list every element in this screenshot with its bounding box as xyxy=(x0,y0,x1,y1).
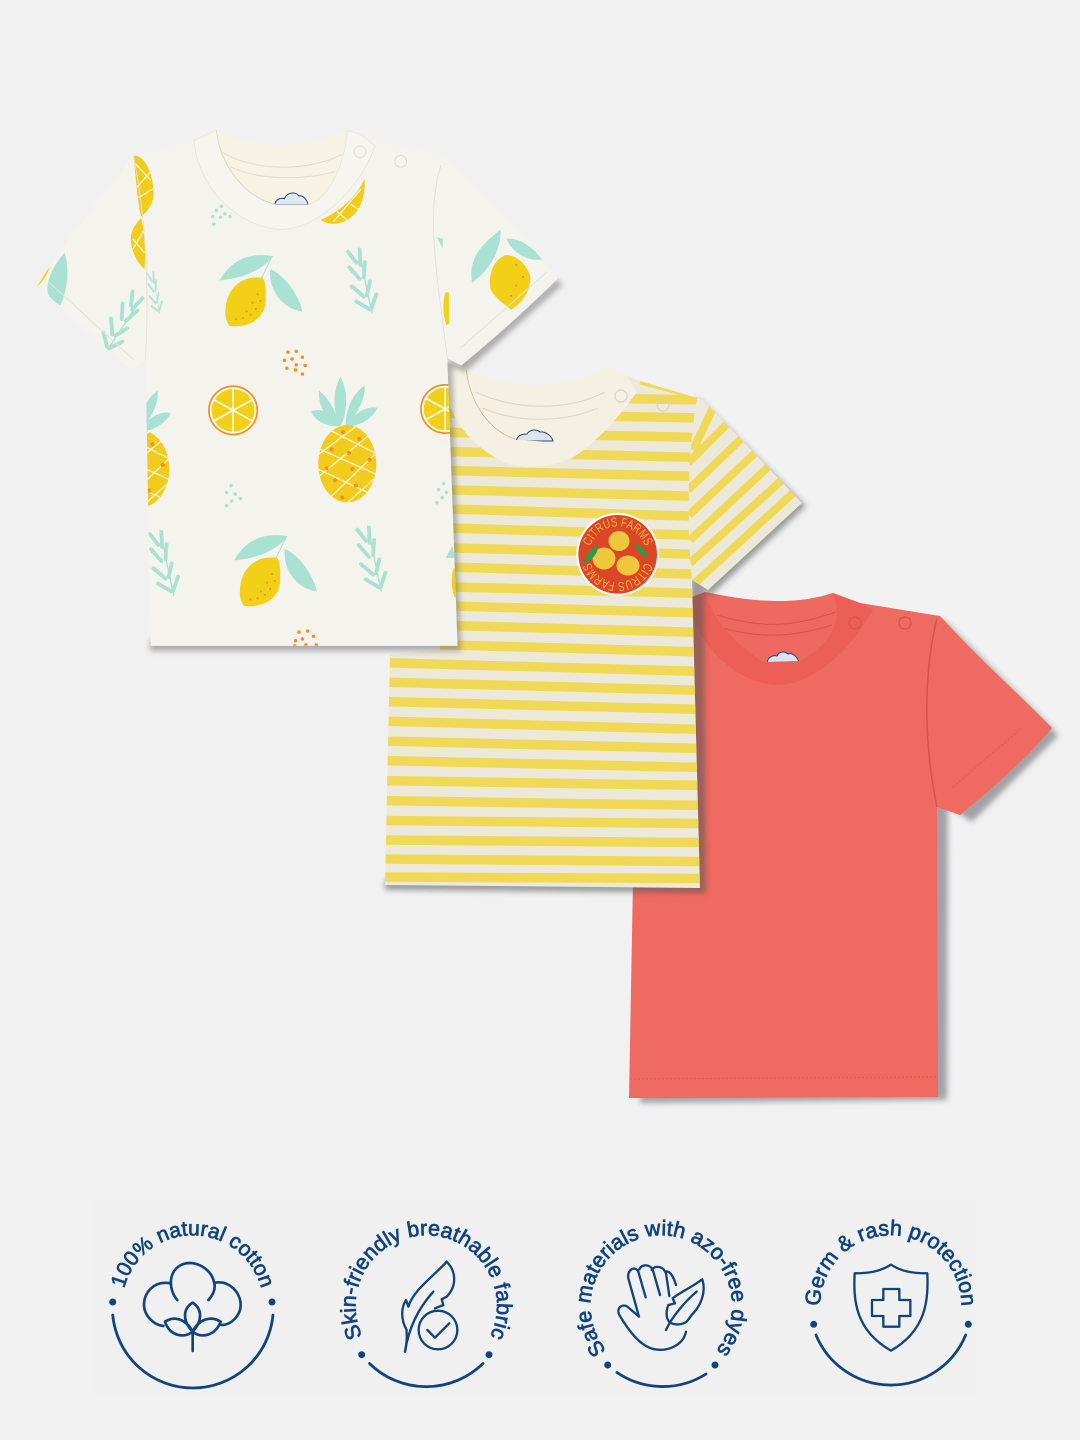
icon: feather with check xyxy=(402,1262,457,1352)
fern motifs xyxy=(89,248,386,595)
citrus farms top text: CITRUS FARMS xyxy=(583,518,652,546)
badge: skin-friendly breathable fabric xyxy=(340,1221,513,1388)
pineapple fragments on left shoulder xyxy=(131,155,153,269)
icon: coral shirt cloud label xyxy=(767,652,799,663)
badge ring: protection xyxy=(816,1335,966,1385)
citrus farms bottom text: CITRUS FARMS xyxy=(583,564,652,592)
badge dots: dyes xyxy=(608,1362,715,1368)
front collar band xyxy=(194,130,375,230)
panel: coral t-shirt xyxy=(629,592,1058,1103)
inner neck xyxy=(216,130,347,205)
icon: hand and feather xyxy=(618,1265,704,1350)
badge ring: dyes xyxy=(617,1372,706,1387)
lemon motif bottom xyxy=(234,535,317,606)
pineapple motif centre xyxy=(311,377,378,503)
badge dots: protection xyxy=(814,1321,968,1328)
icon: citrus farms round badge xyxy=(576,512,660,596)
yellow body fragments at right seam xyxy=(443,292,458,598)
badge text: protection: Germ & rash protection xyxy=(805,1219,974,1306)
badge dots: fabric xyxy=(362,1351,489,1358)
badge: germ and rash protection xyxy=(805,1219,974,1386)
panel: white fruit-print t-shirt xyxy=(36,130,562,651)
panel: yellow striped t-shirt xyxy=(382,363,808,896)
badge dots: cotton xyxy=(113,1298,272,1306)
icon band backdrop xyxy=(92,1200,976,1396)
lemon motif top xyxy=(220,255,302,326)
icon: shield with cross xyxy=(854,1265,928,1351)
badge text: cotton: 100% natural cotton xyxy=(112,1222,272,1288)
badge text: fabric: Skin-friendly breathable fabric xyxy=(340,1221,513,1340)
badge: 100% natural cotton xyxy=(109,1222,276,1390)
pineapple motif left edge xyxy=(146,391,171,506)
badge ring: cotton xyxy=(113,1315,273,1388)
badge text: dyes: Safe materials with azo-free dyes xyxy=(577,1219,747,1356)
icon: cotton boll xyxy=(144,1263,241,1351)
orange dots xyxy=(283,350,318,648)
icon: yellow shirt cloud label xyxy=(516,430,553,441)
badge ring: fabric xyxy=(370,1364,483,1387)
icon: white shirt cloud label xyxy=(275,193,308,205)
citrus slices xyxy=(209,385,469,434)
pineapple fragment at collar xyxy=(320,179,365,224)
right sleeve lemon xyxy=(471,230,542,310)
left sleeve leaf xyxy=(47,253,67,306)
sleeve seams xyxy=(49,156,547,360)
teal dots and fragments xyxy=(211,204,455,558)
badge: safe materials with azo-free dyes xyxy=(577,1219,747,1388)
